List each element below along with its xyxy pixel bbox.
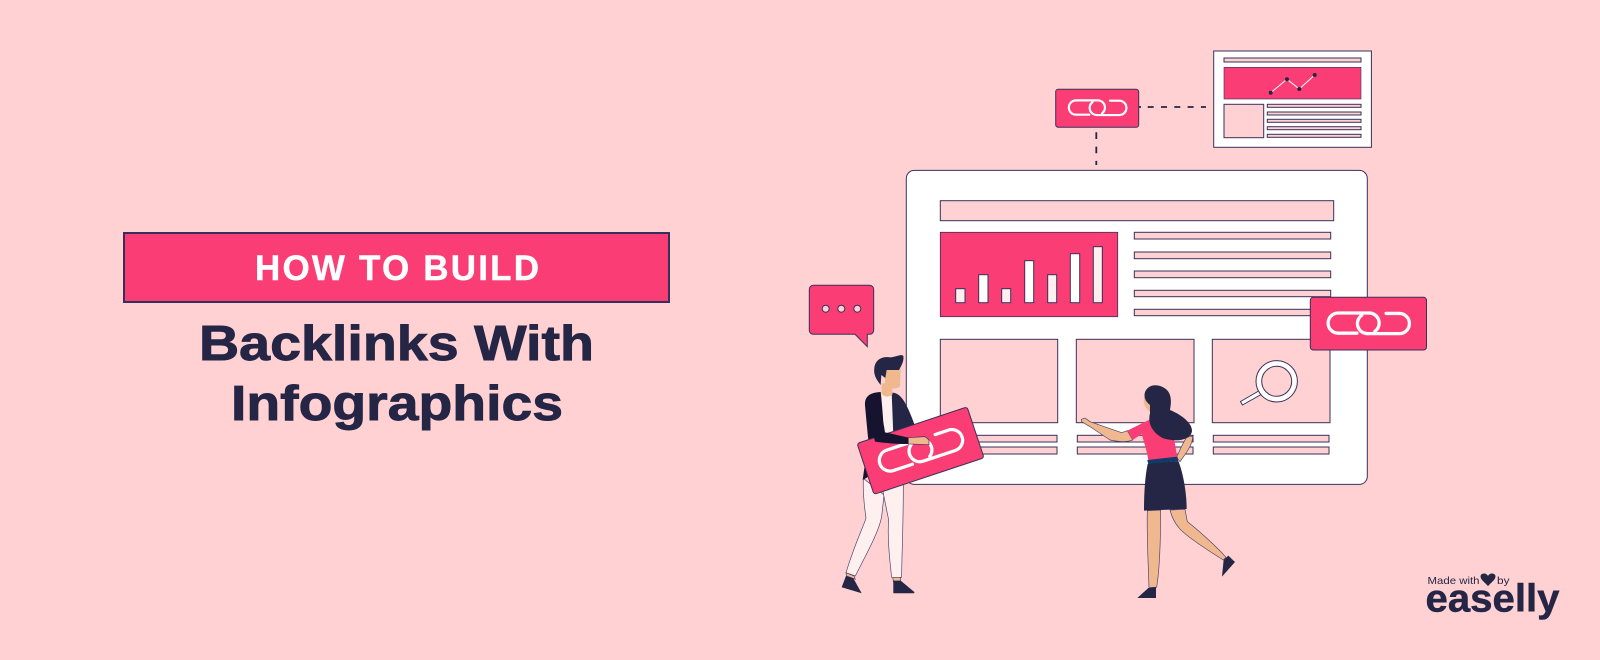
main web page panel: [906, 170, 1367, 484]
small document: [1214, 51, 1371, 147]
icon: magnifying glass: [1240, 361, 1297, 405]
content box left: [940, 339, 1058, 454]
easelly logo: [1426, 574, 1560, 621]
heading: infographics: Infographics: [231, 377, 563, 431]
made with love line: [1428, 574, 1510, 587]
held link card: [857, 407, 984, 494]
heading banner: how to build: HOW TO BUILD: [255, 249, 539, 288]
small link card: [1056, 89, 1139, 127]
large link card: [1310, 297, 1426, 350]
mini line chart: [1224, 67, 1361, 99]
dashed connector: link to main page: [1095, 132, 1097, 165]
bar chart: [940, 232, 1118, 317]
woman pointing at page: [1081, 385, 1235, 598]
heading banner: how to build: [124, 233, 669, 302]
dashed connector: link to document: [1139, 106, 1206, 108]
man holding link card: [842, 355, 984, 593]
page header bar: [940, 201, 1334, 221]
speech bubble: [809, 285, 874, 347]
title block: [124, 233, 669, 431]
made with love line: by: [1497, 575, 1510, 587]
easelly wordmark: easelly: [1426, 578, 1560, 621]
heading: backlinks with: Backlinks With: [199, 317, 594, 371]
text lines: [1134, 232, 1331, 316]
made with love line: Made with: [1428, 575, 1480, 587]
content box middle: [1076, 339, 1194, 454]
content box right: [1212, 339, 1330, 454]
